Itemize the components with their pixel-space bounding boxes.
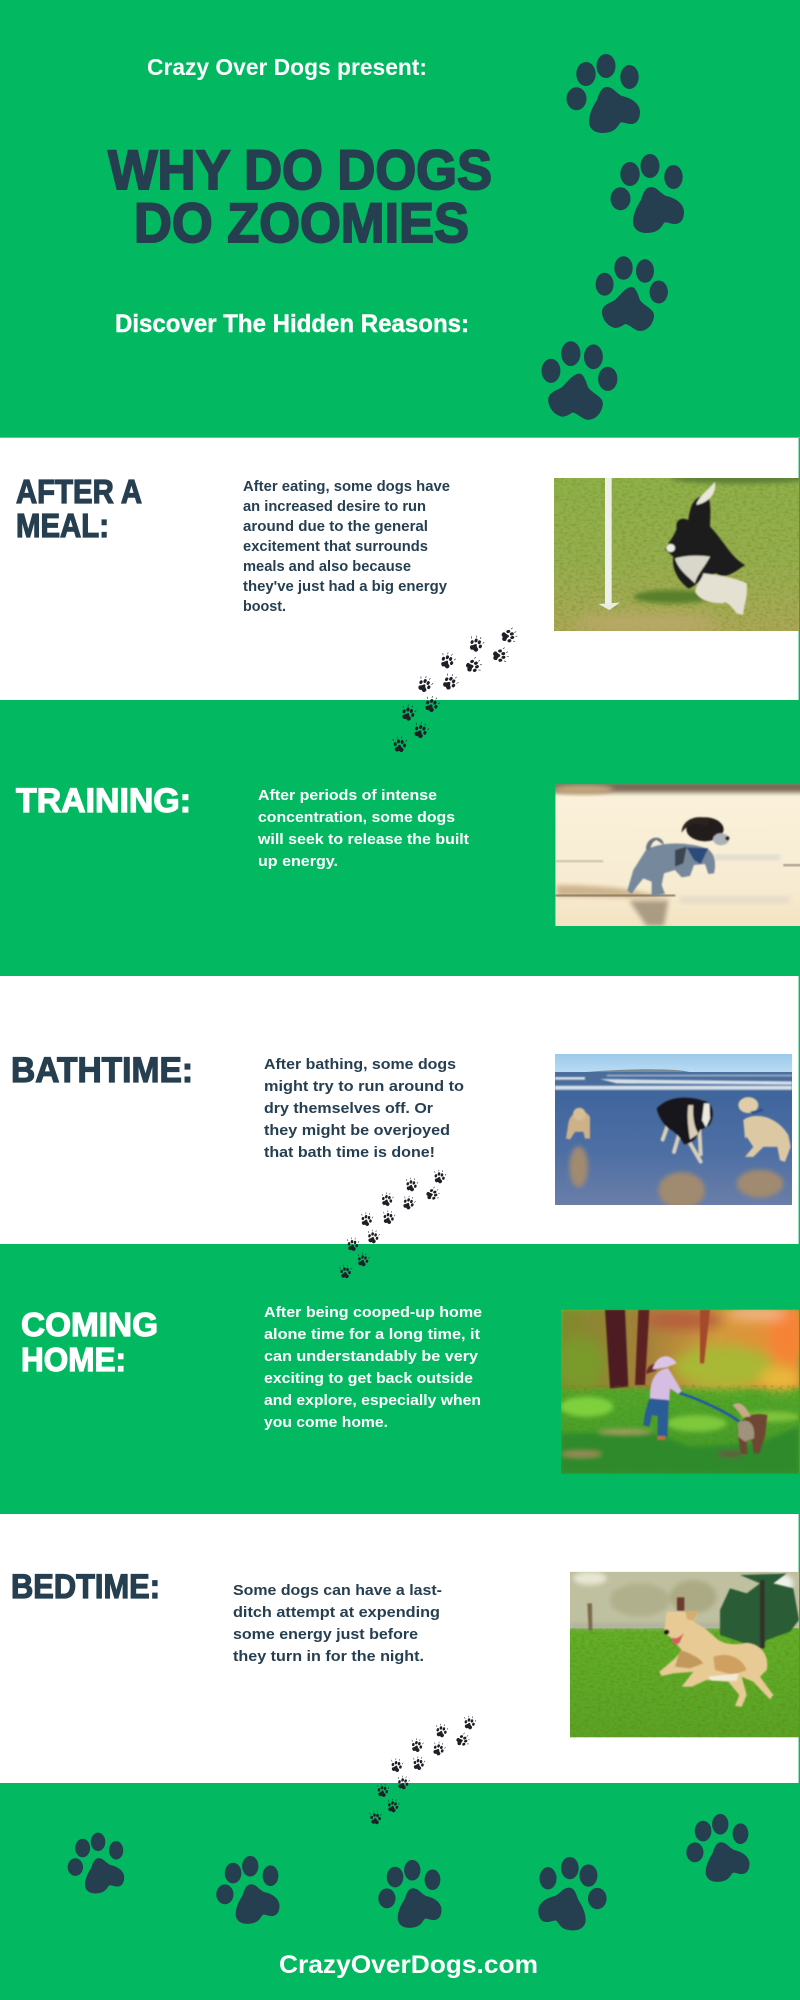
heading: bedtime: BEDTIME:	[11, 1568, 160, 1606]
heading: after a meal: AFTER A	[16, 473, 142, 510]
tracks: tiny paw trail three	[370, 1715, 477, 1824]
text block: training: After periods of intense	[258, 787, 437, 804]
text block: coming home: you come home.	[264, 1414, 388, 1431]
text block: coming home: alone time for a long time, it	[264, 1326, 480, 1343]
text block: bedtime: Some dogs can have a last-	[233, 1582, 442, 1599]
text block: after a meal: meals and also because	[243, 558, 411, 575]
panel: bathtime	[11, 1051, 792, 1278]
text block: bedtime	[233, 1582, 442, 1665]
text block: bathtime: After bathing, some dogs	[264, 1056, 456, 1073]
text block: bathtime: dry themselves off. Or	[264, 1100, 433, 1117]
heading: after a meal: MEAL:	[16, 507, 109, 544]
text block: bathtime: they might be overjoyed	[264, 1122, 450, 1139]
text block: after a meal: boost.	[243, 598, 286, 615]
text block: coming home: and explore, especially when	[264, 1392, 481, 1409]
text block: bedtime: ditch attempt at expending	[233, 1604, 440, 1621]
text block: training: will seek to release the built	[257, 831, 469, 848]
text block: after a meal: around due to the general	[243, 518, 428, 535]
title: WHY DO DOGS	[108, 138, 492, 201]
tracks: tiny paw trail two	[340, 1169, 447, 1278]
text block: bathtime: might try to run around to	[264, 1078, 464, 1095]
tracks: tiny paw trail one	[393, 627, 519, 752]
photo: golden retriever running on grass	[570, 1572, 799, 1738]
subtitle: Discover The Hidden Reasons:	[115, 310, 469, 338]
text block: training: concentration, some dogs	[258, 809, 455, 826]
heading: coming home: HOME:	[21, 1341, 126, 1378]
text block: after a meal: they've just had a big energy	[243, 578, 448, 595]
text block: coming home	[264, 1304, 482, 1431]
text block: bedtime: some energy just before	[233, 1626, 418, 1643]
title	[108, 138, 492, 254]
panel: after a meal	[16, 473, 800, 752]
photo: border collie on grass	[554, 478, 799, 631]
heading: training: TRAINING:	[16, 782, 191, 820]
heading: coming home	[21, 1306, 158, 1378]
text block: after a meal: After eating, some dogs have	[243, 478, 450, 495]
text block: bedtime: they turn in for the night.	[233, 1648, 424, 1665]
text block: bathtime: that bath time is done!	[264, 1144, 435, 1161]
text block: after a meal	[243, 478, 450, 615]
photo: three dogs on a beach	[555, 1054, 792, 1205]
icons: footer paw prints	[68, 1814, 750, 1930]
heading: coming home: COMING	[21, 1306, 158, 1343]
text block: bathtime	[264, 1056, 464, 1161]
heading: bathtime: BATHTIME:	[11, 1051, 193, 1090]
title: DO ZOOMIES	[134, 191, 469, 254]
photo: child walking dog in forest	[561, 1310, 799, 1474]
text block: training: up energy.	[258, 853, 338, 870]
header text: presenter line: Crazy Over Dogs present:	[147, 54, 427, 80]
footer: website: CrazyOverDogs.com	[279, 1951, 538, 1979]
icons: header paw prints	[542, 54, 684, 420]
text block: after a meal: an increased desire to run	[243, 498, 426, 515]
text block: coming home: can understandably be very	[264, 1348, 479, 1365]
panel: bedtime	[11, 1568, 799, 1824]
photo: wet dog running through water	[555, 784, 800, 926]
panel: training	[16, 780, 800, 926]
text block: coming home: exciting to get back outside	[264, 1370, 473, 1387]
text block: after a meal: excitement that surrounds	[243, 538, 428, 555]
heading: after a meal	[16, 473, 142, 544]
text block: training	[257, 787, 469, 870]
text block: coming home: After being cooped-up home	[264, 1304, 482, 1321]
panel: coming home	[21, 1304, 800, 1474]
